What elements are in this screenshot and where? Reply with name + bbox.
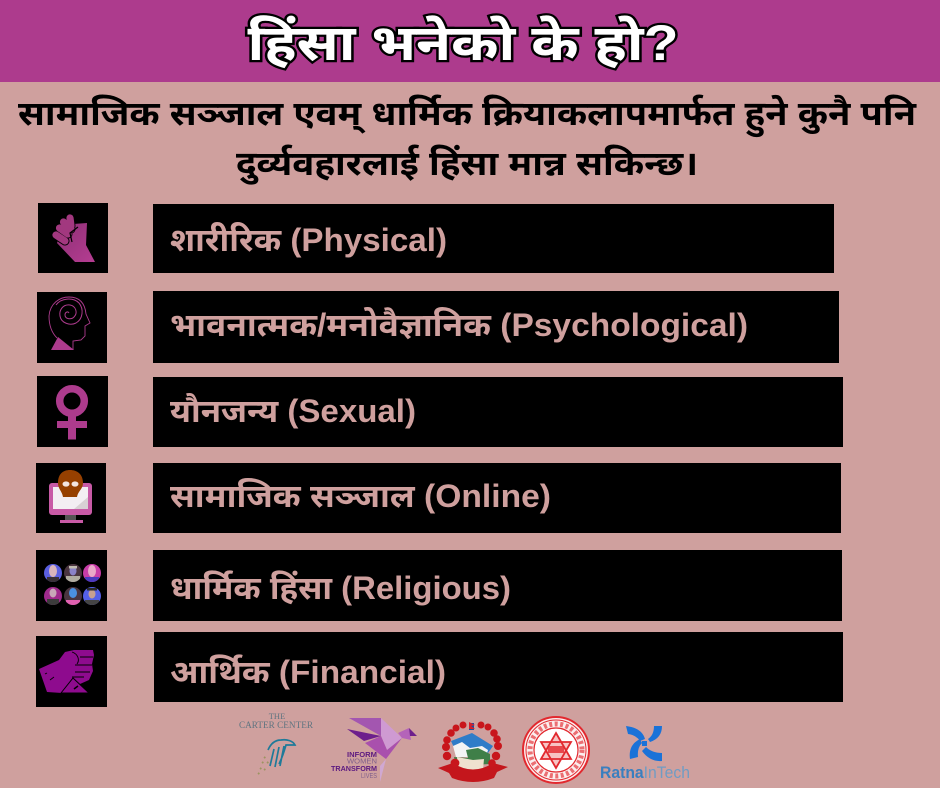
- row: religious: धार्मिक हिंसा (Religious): [170, 570, 511, 606]
- row: psychological: भावनात्मक/मनोवैज्ञानिक (Psychological): [170, 307, 748, 343]
- row: financial: आर्थिक (Financial): [170, 654, 446, 690]
- subtitle: सामाजिक सञ्जाल एवम् धार्मिक क्रियाकलापमार्फत हुने कुनै पनि: [18, 94, 917, 138]
- logo: The Carter Center: THE: [269, 711, 285, 721]
- logo: The Carter Center: CARTER CENTER: [239, 720, 313, 730]
- row: psychological: [153, 291, 839, 363]
- row: online: सामाजिक सञ्जाल (Online): [170, 478, 551, 514]
- icon: six portrait avatars: [36, 550, 107, 621]
- row: physical: शारीरिक (Physical): [170, 222, 447, 258]
- logo: RatnaInTech: RatnaInTech: [600, 764, 690, 782]
- logo: Inform Women Transform Lives: LIVES: [361, 773, 377, 780]
- subtitle: दुर्व्यवहारलाई हिंसा मान्न सकिन्छ।: [236, 144, 698, 185]
- row: physical: [153, 204, 834, 273]
- title banner: [0, 0, 940, 82]
- logo: Inform Women Transform Lives: [331, 718, 417, 782]
- row: religious: [153, 550, 842, 621]
- logo: Nepal government emblem: [438, 722, 508, 782]
- logo: RatnaInTech: [600, 726, 690, 782]
- icon: head with spiral: [37, 292, 107, 363]
- logo: Inform Women Transform Lives: INFORM: [347, 752, 377, 759]
- icon: female symbol: [37, 376, 108, 447]
- icon: fist: [38, 203, 108, 273]
- logo: Kathmandu Metropolitan City seal: [523, 717, 589, 783]
- icon: computer with skull: [36, 463, 106, 533]
- logo: The Carter Center: [239, 711, 313, 774]
- row: online: [153, 463, 841, 533]
- logo: Inform Women Transform Lives: WOMEN: [347, 758, 377, 766]
- row: sexual: यौनजन्य (Sexual): [170, 393, 416, 429]
- row: financial: [154, 632, 843, 702]
- row: sexual: [153, 377, 843, 447]
- logo: Inform Women Transform Lives: TRANSFORM: [331, 764, 377, 773]
- icon: hand gripping money: [36, 636, 107, 707]
- title: हिंसा भनेको के हो?: [248, 15, 678, 71]
- subtitle: [18, 94, 917, 185]
